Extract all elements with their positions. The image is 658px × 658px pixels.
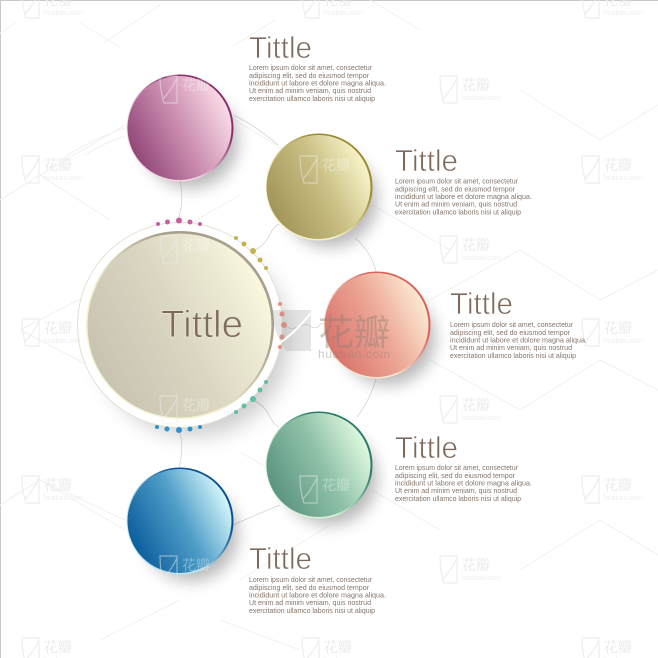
text block 3: incididunt ut labore et dolore magna aliqua. xyxy=(450,336,587,344)
text block 3 xyxy=(450,286,587,360)
pink circle xyxy=(126,74,238,188)
watermarks over circles: 花瓣 xyxy=(182,77,210,93)
text block 4: Lorem ipsum dolor sit amet, consectetur xyxy=(395,463,518,472)
watermark grid: huaban.com xyxy=(462,415,501,422)
text block 4: Tittle xyxy=(395,430,458,465)
text block 4 xyxy=(395,430,532,503)
central large watermark: 花瓣 xyxy=(318,312,390,353)
watermark grid: huaban.com xyxy=(604,10,643,17)
central large watermark xyxy=(272,310,390,361)
watermark grid: 花瓣 xyxy=(44,157,72,173)
text block 4: Ut enim ad minim veniam, quis nostrud xyxy=(395,486,517,495)
text block 2: Lorem ipsum dolor sit amet, consectetur xyxy=(395,176,518,186)
teal dots xyxy=(234,380,268,414)
text block 1: Lorem ipsum dolor sit amet, consectetur xyxy=(249,63,372,72)
olive dots xyxy=(234,236,268,270)
main title: Tittle xyxy=(161,304,243,346)
text block 2: Tittle xyxy=(395,143,458,178)
text block 5: adipiscing elit, sed do eiusmod tempor xyxy=(249,583,370,592)
watermark grid: 花瓣 xyxy=(324,639,352,655)
text block 1: exercitation ullamco laboris nisi ut aliquip xyxy=(249,94,375,103)
text block 3: exercitation ullamco laboris nisi ut aliquip xyxy=(450,351,576,360)
salmon circle xyxy=(324,272,435,385)
salmon dots xyxy=(278,302,287,349)
text block 5: exercitation ullamco laboris nisi ut aliquip xyxy=(249,606,375,615)
text block 3: Lorem ipsum dolor sit amet, consectetur xyxy=(450,320,573,329)
olive circle xyxy=(266,134,377,247)
watermark grid: huaban.com xyxy=(604,495,643,502)
watermarks over circles: 花瓣 xyxy=(182,237,210,253)
watermark grid: huaban.com xyxy=(462,255,501,262)
watermarks over circles: 花瓣 xyxy=(182,557,210,573)
text block 2: adipiscing elit, sed do eiusmod tempor xyxy=(395,184,516,194)
text block 3: adipiscing elit, sed do eiusmod tempor xyxy=(450,328,571,337)
text block 1: Ut enim ad minim veniam, quis nostrud xyxy=(249,86,371,95)
text block 1: Tittle xyxy=(249,30,312,65)
text block 5: incididunt ut labore et dolore magna aliqua. xyxy=(249,590,386,600)
text block 3: Ut enim ad minim veniam, quis nostrud xyxy=(450,343,572,352)
watermark grid: 花瓣 xyxy=(462,397,490,413)
watermark grid: huaban.com xyxy=(604,338,643,345)
watermark grid: 花瓣 xyxy=(462,77,490,93)
text block 3: Tittle xyxy=(450,286,513,321)
text block 5 xyxy=(249,541,386,615)
watermark grid: 花瓣 xyxy=(604,157,632,173)
main circle face xyxy=(88,234,272,418)
text block 2: exercitation ullamco laboris nisi ut aliquip xyxy=(395,208,521,216)
text block 1 xyxy=(249,30,386,103)
watermarks over circles: 花瓣 xyxy=(322,477,350,493)
curved connectors between circles xyxy=(179,115,376,525)
watermark grid: 花瓣 xyxy=(604,320,632,336)
text block 5: Lorem ipsum dolor sit amet, consectetur xyxy=(249,575,372,584)
watermarks over circles: 花瓣 xyxy=(182,397,210,413)
watermark grid: huaban.com xyxy=(462,575,501,582)
watermark grid: 花瓣 xyxy=(462,557,490,573)
main circle shadow xyxy=(99,246,289,436)
text block 2: incididunt ut labore et dolore magna aliqua. xyxy=(395,192,532,201)
watermark grid: huaban.com xyxy=(604,175,643,182)
main circle outer ring xyxy=(78,222,282,428)
green circle xyxy=(266,412,377,525)
watermark grid: huaban.com xyxy=(44,10,83,17)
text block 1: adipiscing elit, sed do eiusmod tempor xyxy=(249,71,370,80)
watermark grid: 花瓣 xyxy=(44,639,72,655)
watermarks over circles: 花瓣 xyxy=(322,157,350,173)
watermark grid: 花瓣 xyxy=(604,639,632,655)
text block 1: incididunt ut labore et dolore magna aliqua. xyxy=(249,78,386,88)
watermark grid: 花瓣 xyxy=(462,237,490,253)
text block 2: Ut enim ad minim veniam, quis nostrud xyxy=(395,200,517,208)
text block 2 xyxy=(395,143,532,216)
central large watermark: huaban.com xyxy=(318,347,390,361)
blue circle xyxy=(126,468,238,581)
main circle xyxy=(78,222,289,436)
watermark grid: huaban.com xyxy=(44,338,83,345)
text block 5: Tittle xyxy=(249,541,312,576)
main circle rim xyxy=(86,231,274,419)
watermark grid: huaban.com xyxy=(44,495,83,502)
watermark grid: huaban.com xyxy=(324,10,363,17)
blue dots xyxy=(155,425,202,433)
watermarks over circles xyxy=(160,76,350,583)
text block 5: Ut enim ad minim veniam, quis nostrud xyxy=(249,598,371,607)
text block 4: exercitation ullamco laboris nisi ut aliquip xyxy=(395,494,521,503)
watermark grid: 花瓣 xyxy=(604,477,632,493)
watermark grid: 花瓣 xyxy=(44,477,72,493)
pink dots xyxy=(156,218,202,226)
watermark grid: huaban.com xyxy=(44,175,83,182)
watermark grid: huaban.com xyxy=(462,95,501,102)
text block 4: adipiscing elit, sed do eiusmod tempor xyxy=(395,471,516,480)
watermark grid: 花瓣 xyxy=(44,320,72,336)
text block 4: incididunt ut labore et dolore magna aliqua. xyxy=(395,478,532,488)
